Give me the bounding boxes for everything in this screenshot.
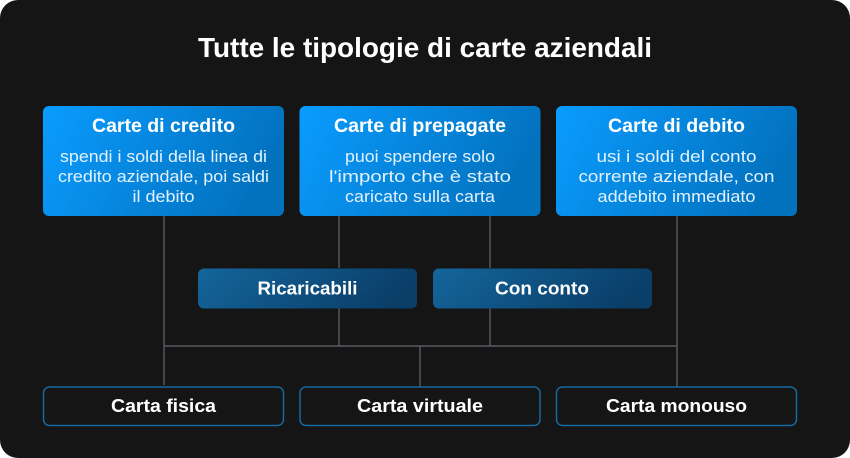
box: carta monouso: Carta monouso — [606, 395, 747, 416]
box: carta fisica: Carta fisica — [111, 395, 217, 416]
panel: carte di prepagate — [300, 106, 540, 216]
box: carta fisica — [44, 387, 284, 426]
box: con conto — [433, 268, 652, 308]
connector lines — [164, 216, 677, 387]
text: carte di debito description — [578, 147, 774, 206]
box: carta virtuale: Carta virtuale — [357, 395, 483, 416]
text: carte di debito description: corrente aziendale, con — [578, 167, 774, 186]
heading: carte di debito: Carte di debito — [608, 116, 745, 137]
text: carte di debito description: addebito immediato — [598, 187, 756, 206]
text: carte di debito description: usi i soldi del conto — [596, 147, 756, 166]
box: ricaricabili — [198, 268, 417, 308]
text: carte di credito description — [58, 147, 269, 206]
heading: carte di prepagate: Carte di prepagate — [334, 116, 506, 137]
text: carte di credito description: credito aziendale, poi saldi — [58, 167, 269, 186]
title: Tutte le tipologie di carte aziendali — [198, 32, 652, 63]
text: carte di prepagate description — [329, 147, 511, 206]
box: con conto: Con conto — [495, 278, 589, 298]
box: carta virtuale — [300, 387, 540, 426]
panel: carte di credito — [43, 106, 284, 216]
text: carte di prepagate description: caricato sulla carta — [345, 187, 496, 206]
text: carte di prepagate description: l'importo che è stato — [329, 167, 511, 186]
panel: carte di debito — [556, 106, 797, 216]
text: carte di prepagate description: puoi spendere solo — [345, 147, 495, 166]
heading: carte di credito: Carte di credito — [92, 116, 235, 137]
text: carte di credito description: il debito — [132, 187, 194, 206]
text: carte di credito description: spendi i soldi della linea di — [60, 147, 267, 166]
box: carta monouso — [556, 387, 796, 426]
box: ricaricabili: Ricaricabili — [258, 278, 358, 298]
